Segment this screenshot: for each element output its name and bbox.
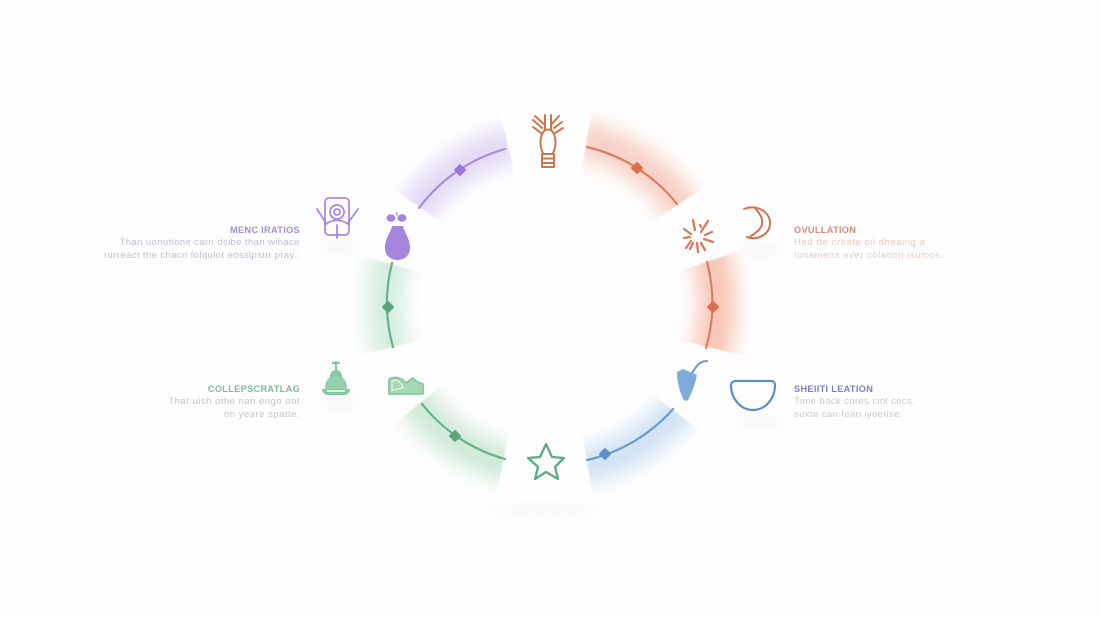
icon: tree bulb [533, 115, 563, 167]
diamond markers [382, 162, 719, 460]
text block: menstruation [104, 225, 300, 261]
segment: top right red [587, 147, 677, 204]
text block: ovulation [794, 225, 943, 261]
segment: left green [387, 263, 393, 347]
icon: open book [389, 378, 423, 394]
colored glows [385, 138, 718, 468]
icon: blue cup [677, 361, 707, 401]
text block: menstruation: MENC IRATIOS [230, 225, 300, 235]
text block: luteal: suxte can fean iyoetise. [794, 409, 903, 420]
text block: menstruation: Than uonutione carn dsibe than wihace [120, 237, 300, 248]
soft icon shadows [316, 242, 784, 514]
text block: menstruation: rurreact the chacn folqolot eosslpsur pray.: [104, 250, 300, 261]
icon: star [528, 444, 564, 479]
icon: purple drop [385, 212, 410, 260]
segment: bottom green [422, 404, 505, 459]
white wedge cut-outs [340, 90, 765, 525]
text block: ovulation: OVULLATION [794, 225, 856, 235]
text block: luteal: Time back cores ciol cocs. [794, 396, 915, 407]
text block: follicular: on yeare spatte. [224, 409, 300, 420]
text block: follicular [168, 384, 300, 420]
icon: domed building [322, 361, 350, 395]
text block: follicular: That uish othe nan engo oot [168, 396, 300, 407]
segment: purple [419, 149, 505, 208]
text block: follicular: COLLEPSCRATLAG [208, 384, 300, 394]
icon: framed figure [317, 198, 358, 238]
text block: luteal: SHEIITI LEATION [794, 384, 873, 394]
text block: luteal [794, 384, 915, 420]
segment: blue [587, 409, 673, 460]
icon: half bowl [731, 381, 775, 410]
text block: ovulation: tunamens ever colation isuiocs. [794, 250, 943, 261]
icon: sunburst [684, 220, 713, 252]
ring segments [387, 147, 712, 460]
segment: right red [706, 262, 712, 348]
text block: ovulation: Hed tte create oil dheaing a [794, 237, 925, 248]
icon: crescent moon [744, 207, 770, 238]
